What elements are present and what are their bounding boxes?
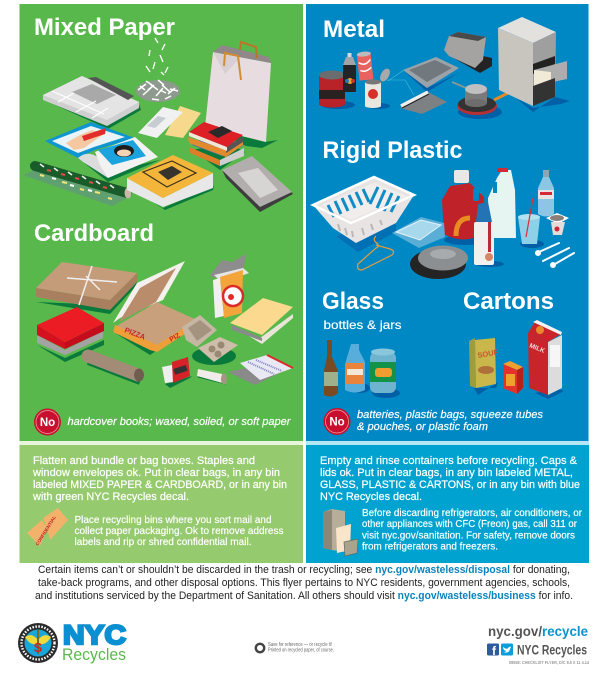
icon: flattened cardboard boxes (36, 262, 137, 314)
icon: sanitation department seal (18, 623, 58, 663)
text: appliances tip: other appliances with CFC (Freon) gas, call 311 or (362, 519, 578, 530)
icon: wrapping paper (23, 164, 132, 206)
icon: paper towel roll (197, 369, 227, 384)
icon: yogurt cup (546, 213, 569, 235)
text: disposal notice: and institutions serviced by the Department of Sanitation. All others should visit nyc.gov/wasteless/business for info. (35, 590, 573, 602)
text: container preparation: GLASS, PLASTIC & CARTONS, or in any bin with blue (320, 479, 580, 491)
subheading: bottles and jars: bottles & jars (324, 318, 402, 332)
icon: milk carton: MILK (528, 342, 546, 355)
text: container preparation: NYC Recycles decal. (320, 491, 422, 503)
icon: metal pan (403, 57, 460, 92)
icon: magazine (45, 122, 160, 182)
icon: shopping bag (205, 42, 278, 148)
text: bin placement tip: collect paper packaging. Ok to remove address (74, 526, 284, 537)
icon: pizza box: PIZZA (123, 325, 147, 342)
text: disposal notice (35, 564, 573, 602)
icon: filing cabinet (498, 17, 570, 112)
icon: torn confidential envelope: CONFIDENTIAL (35, 515, 57, 547)
icon: notepad (228, 355, 293, 385)
logo: NYC Recycles (62, 620, 126, 664)
icon: plastic cup (518, 198, 544, 248)
icon: folder (230, 298, 293, 344)
text: recycled paper note: Save for reference — or recycle it! (268, 642, 332, 648)
icon: no badge (324, 408, 350, 435)
text: paper preparation: window envelopes ok. Put in clear bags, in any bin (32, 467, 280, 479)
logo: NYC Recycles: Recycles (62, 645, 126, 664)
icon: beer bottle (324, 340, 338, 397)
text: paper preparation: labeled MIXED PAPER & CARDBOARD, or in any bin (33, 479, 287, 491)
logo: NYC Recycles: NYC (63, 620, 126, 650)
text: exclusions (357, 409, 543, 433)
icon: plastic cutlery (536, 243, 574, 267)
icon: egg carton (182, 315, 238, 365)
icon: water bottle (538, 170, 554, 216)
icon: toaster (444, 32, 492, 73)
panel: paper instructions (20, 445, 303, 563)
text: exclusions: hardcover books; waxed, soiled, or soft paper (68, 416, 292, 428)
icon: pizza box (112, 261, 197, 355)
text: bin placement tip: labels and rip or shred confidential mail. (74, 537, 252, 548)
text: appliances tip: visit nyc.gov/sanitation. For safety, remove doors (362, 530, 575, 542)
heading: Metal: Metal (323, 16, 385, 43)
icon: plastic clamshell (392, 217, 445, 248)
icon: facebook (487, 644, 499, 658)
icon: twitter (501, 644, 513, 656)
text: bin placement tip: Place recycling bins where you sort mail and (74, 515, 272, 526)
panel: metal glass plastic cartons (306, 4, 589, 445)
icon: spray can (343, 53, 356, 92)
icon: blue glass bottle (345, 344, 370, 393)
icon: cardboard tube (88, 356, 144, 382)
text: container preparation (320, 455, 580, 503)
icon: milk carton (528, 320, 564, 399)
text: paper preparation (32, 455, 287, 503)
text: paper preparation: with green NYC Recycles decal. (32, 491, 189, 503)
icon: facebook: f (492, 644, 497, 658)
text: bin placement tip (74, 515, 284, 548)
icon: juice box (503, 361, 523, 394)
heading: Glass: Glass (322, 288, 384, 315)
panel: paper and cardboard (20, 4, 303, 445)
heading: Mixed Paper: Mixed Paper (34, 14, 175, 41)
icon: white squeeze bottle (474, 202, 504, 267)
icon: pots and pans (452, 82, 516, 119)
icon: aluminum foil (385, 70, 447, 114)
text: appliances tip (362, 508, 583, 552)
panel: container instructions (306, 445, 589, 563)
icon: refrigerator and air conditioner (323, 509, 358, 556)
icon: coffee can (319, 70, 355, 109)
text: container preparation: Empty and rinse containers before recycling. Caps & (320, 455, 578, 467)
icon: small red box (162, 357, 192, 388)
text: container preparation: lids ok. Put in clear bags, in any bin labeled METAL, (320, 467, 573, 479)
icon: torn confidential envelope (27, 508, 68, 547)
icon: envelopes (138, 106, 201, 138)
text: disposal notice: take-back programs, and other disposal options. This flyer pertains to NYC residents, government agencies, schools, (38, 577, 570, 589)
icon: sanitation department seal: S (34, 640, 43, 655)
icon: letter pages (222, 156, 293, 212)
text: appliances tip: from refrigerators and freezers. (362, 542, 498, 552)
icon: stack of books (188, 122, 245, 170)
icon: no badge (34, 408, 61, 436)
icon: no badge: No (329, 416, 345, 428)
heading: Rigid Plastic: Rigid Plastic (322, 137, 462, 164)
text: website: nyc.gov/recycle (488, 623, 588, 639)
icon: round takeout container (410, 246, 468, 279)
icon: phone book (127, 155, 214, 210)
icon: wire hanger (358, 236, 394, 270)
text: recycled paper note: Printed on recycled paper, of course. (268, 648, 334, 654)
icon: red shoe box (37, 307, 104, 362)
icon: red detergent jug (442, 170, 486, 245)
icon: soda can (357, 51, 373, 81)
icon: tomato can with lid (365, 67, 392, 109)
icon: pizza box: PIZ (168, 332, 182, 344)
text: paper preparation: Flatten and bundle or bag boxes. Staples and (33, 455, 255, 467)
icon: laundry basket (313, 177, 414, 252)
callout: not accepted paper (34, 408, 292, 436)
icon: newspaper (43, 76, 141, 129)
text: exclusions: & pouches, or plastic foam (357, 421, 488, 433)
icon: soup carton (469, 338, 499, 395)
icon: shredded paper (136, 38, 180, 102)
icon: cereal box (210, 254, 249, 318)
text: recycled paper note (256, 642, 334, 654)
heading: Cartons: Cartons (463, 288, 554, 315)
heading: Cardboard: Cardboard (34, 220, 154, 247)
text: print code: 08558: CHECKLIST FLYER, D/C 8.5 X 11 4.14 (509, 660, 590, 665)
text: appliances tip: Before discarding refrigerators, air conditioners, or (362, 508, 583, 519)
icon: glass jar (370, 348, 400, 398)
callout: not accepted containers (324, 408, 543, 435)
icon: milk jug (488, 168, 516, 238)
text: exclusions: batteries, plastic bags, squeeze tubes (357, 409, 543, 421)
icon: soup carton: SOUP (477, 347, 499, 360)
text: disposal notice: Certain items can’t or shouldn’t be discarded in the trash or recycling; see nyc.gov/wasteless/disposal for donating, (38, 564, 570, 576)
icon: no badge: No (40, 417, 55, 429)
